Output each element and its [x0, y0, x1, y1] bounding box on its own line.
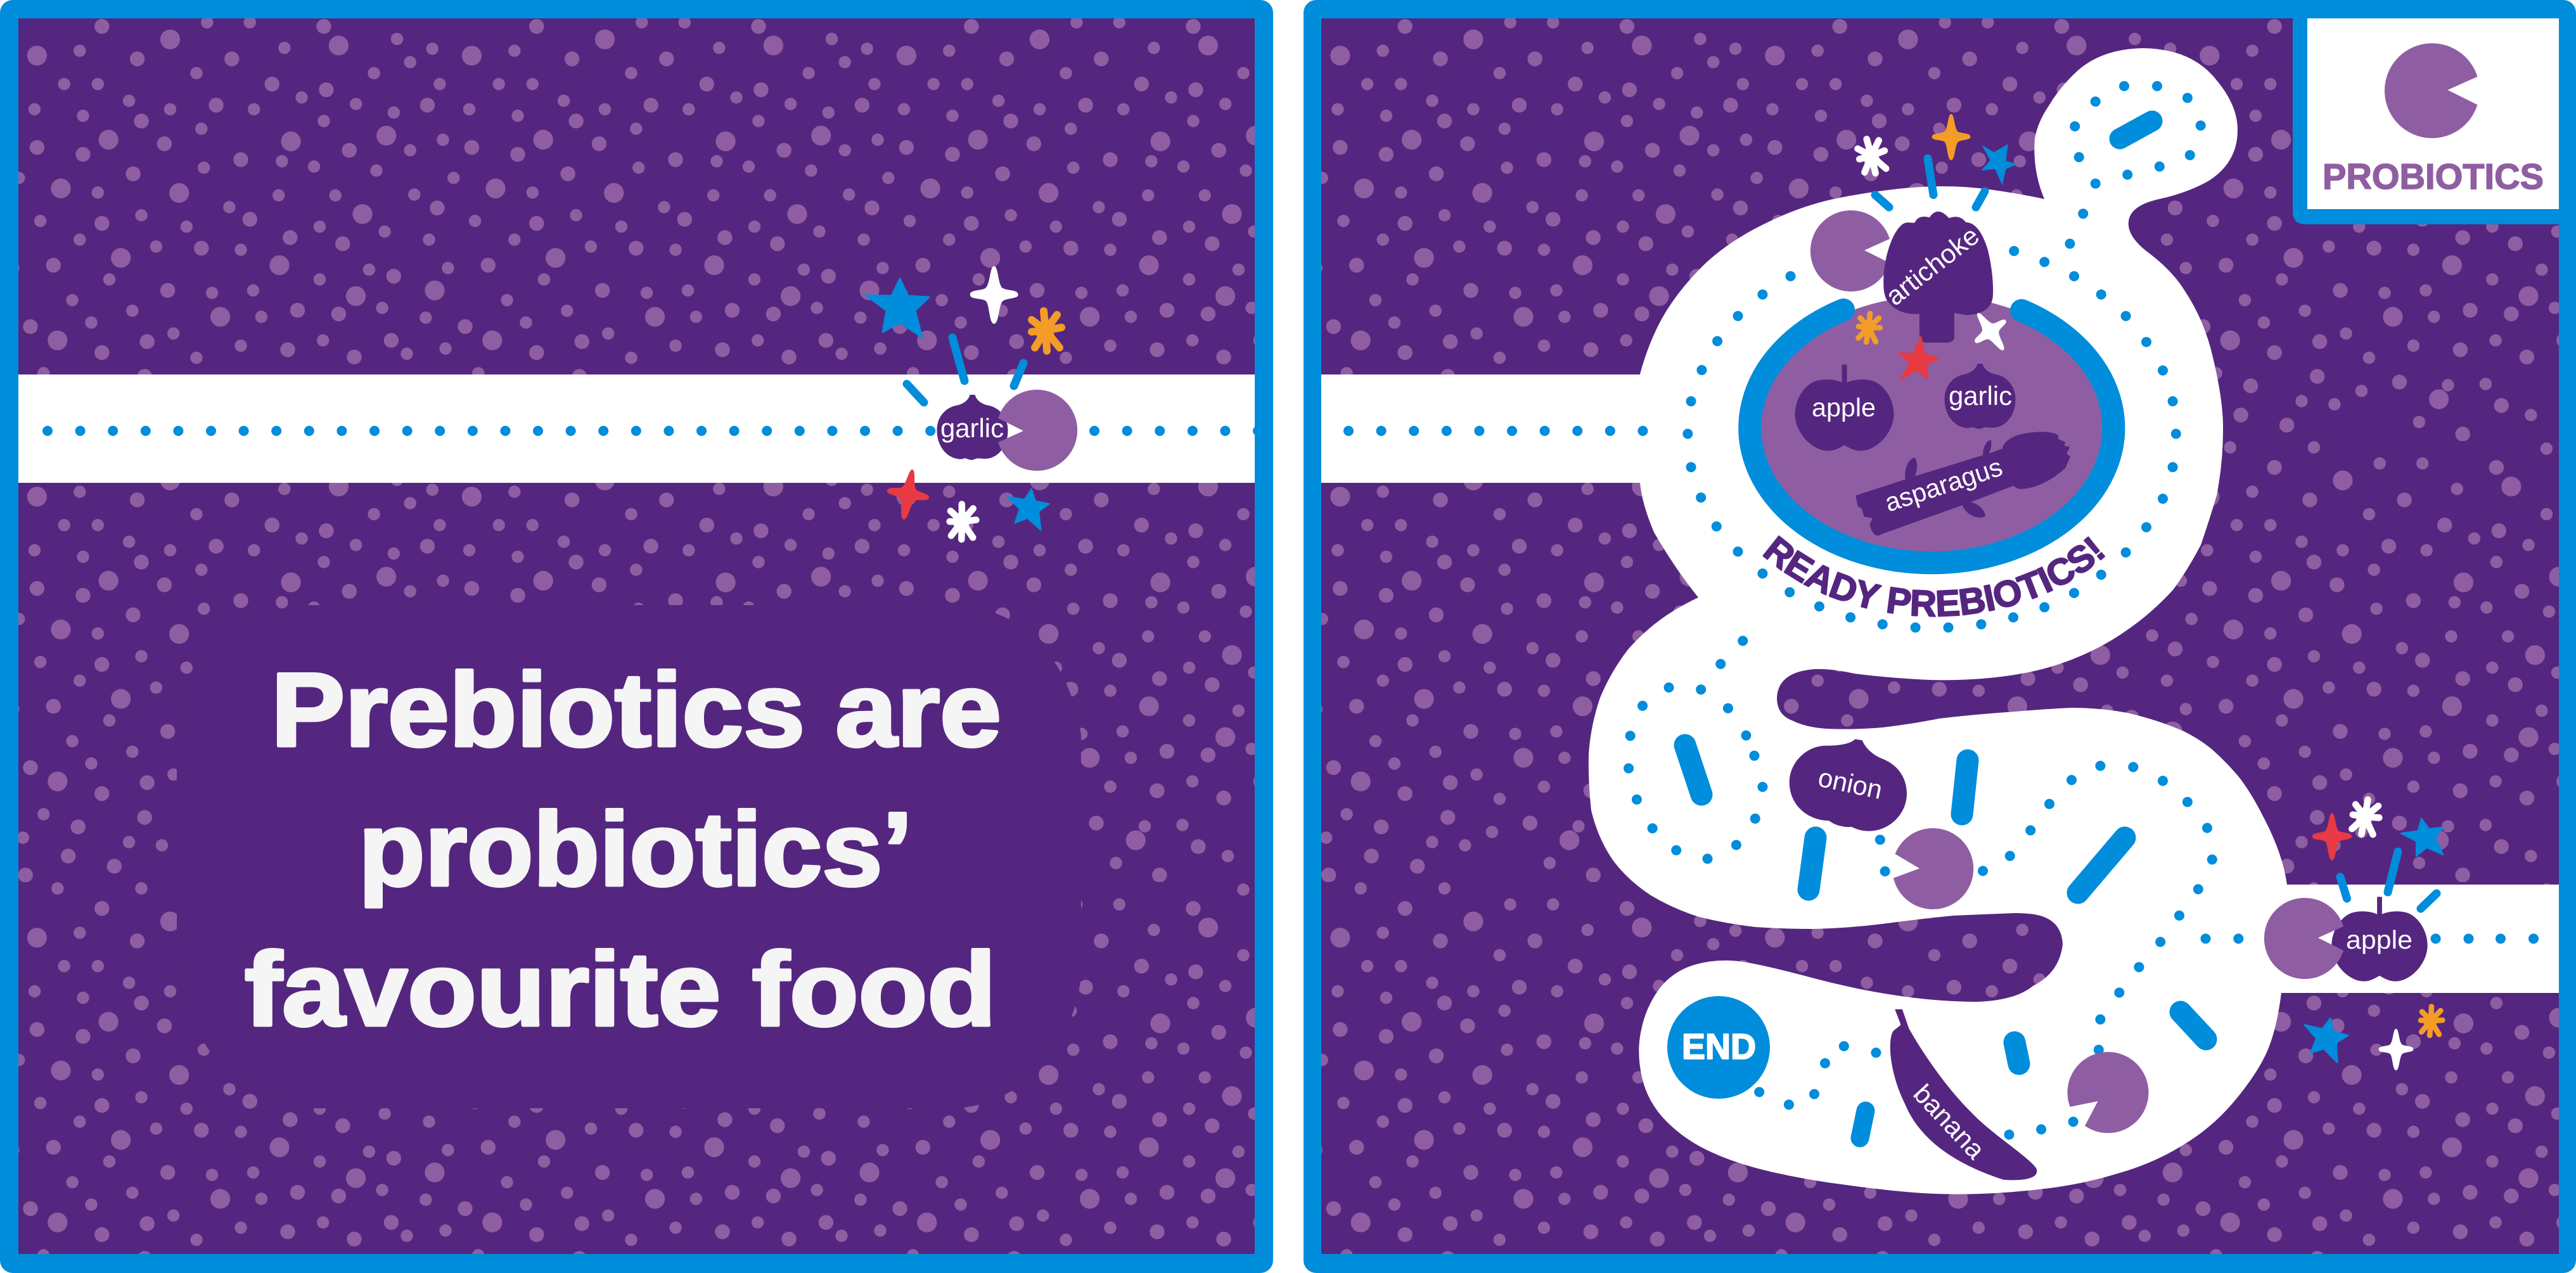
panel: prebiotics statement: [0, 0, 1273, 1273]
icon: probiotic pac-man: [998, 390, 1077, 471]
icon: asparagus: asparagus: [1881, 452, 2006, 518]
icon: white splat: [2349, 797, 2383, 838]
icon: small blue star: [1003, 485, 1051, 531]
icon: blue star: [1981, 144, 2017, 185]
icon: apple in bowl: [1795, 365, 1894, 451]
icon: orange sparkle: [1932, 114, 1970, 160]
burst rays: [907, 338, 1023, 402]
icon: white sparkle: [2379, 1029, 2413, 1070]
heading: [245, 651, 1001, 1047]
icon: lower blue star: [2298, 1013, 2351, 1063]
icon: apple on right strip: [2331, 897, 2428, 982]
icon: probiotic pac-man: [2385, 43, 2477, 138]
dotted path through gut: [1349, 86, 2534, 1135]
icon: red star in bowl: [1897, 335, 1940, 381]
icon: orange splat in bowl: [1855, 312, 1883, 344]
icon: onion: onion: [1816, 762, 1885, 805]
probiotic pac-man eating apple: [2264, 898, 2343, 979]
icon: banana: banana: [1907, 1078, 1991, 1165]
white digestive tract strip: [18, 374, 1255, 483]
icon: white sparkle in bowl: [1963, 302, 2019, 361]
heading: favourite food: [245, 931, 996, 1047]
probiotics legend box: [2293, 18, 2559, 224]
blue bacteria rods: [1685, 121, 2206, 1138]
icon: asparagus: [1855, 432, 2070, 535]
end marker: [1667, 996, 1770, 1099]
icon: blue star: [866, 279, 929, 337]
dotted path: [48, 426, 1259, 436]
icon: apple in bowl: apple: [1812, 393, 1876, 422]
icon: white splat: [948, 503, 977, 541]
end marker: END: [1682, 1027, 1756, 1067]
icon: red sparkle: [2312, 813, 2352, 860]
heading backdrop: [177, 605, 1081, 1108]
heading: Prebiotics are: [271, 651, 1001, 768]
white gut shape: [1321, 48, 2559, 1194]
icon: red sparkle: [883, 466, 933, 523]
icon: artichoke: artichoke: [1880, 221, 1985, 311]
label: probiotics: PROBIOTICS: [2323, 157, 2544, 197]
icon: orange splat: [1032, 311, 1061, 351]
icon: blue star: [2399, 815, 2448, 861]
stomach bowl of ready prebiotics: [1750, 296, 2116, 566]
probiotic pac-man near banana: [2053, 1035, 2165, 1148]
burst rays around apple: [2340, 852, 2437, 909]
probiotic pac-man near artichoke: [1810, 210, 1890, 291]
icon: garlic in bowl: [1944, 364, 2015, 429]
icon: garlic in bowl: garlic: [1949, 381, 2012, 411]
heading: probiotics’: [359, 791, 913, 907]
panel: probiotics gut journey: [1304, 0, 2576, 1273]
icon: white splat: [1856, 136, 1888, 176]
icon: white sparkle: [970, 266, 1018, 324]
probiotic pac-man near onion: [1892, 826, 1976, 912]
burst rays around artichoke: [1875, 158, 1985, 207]
icon: artichoke: [1880, 212, 1993, 343]
curved label: ready prebiotics: READY PREBIOTICS!: [1762, 535, 2105, 617]
label: garlic: garlic: [940, 413, 1004, 443]
icon: onion: [1790, 739, 1907, 831]
icon: orange splat: [2419, 1006, 2444, 1037]
icon: banana: [1890, 1009, 2037, 1180]
label: apple: apple: [2346, 925, 2413, 954]
icon: garlic: [937, 395, 1008, 460]
